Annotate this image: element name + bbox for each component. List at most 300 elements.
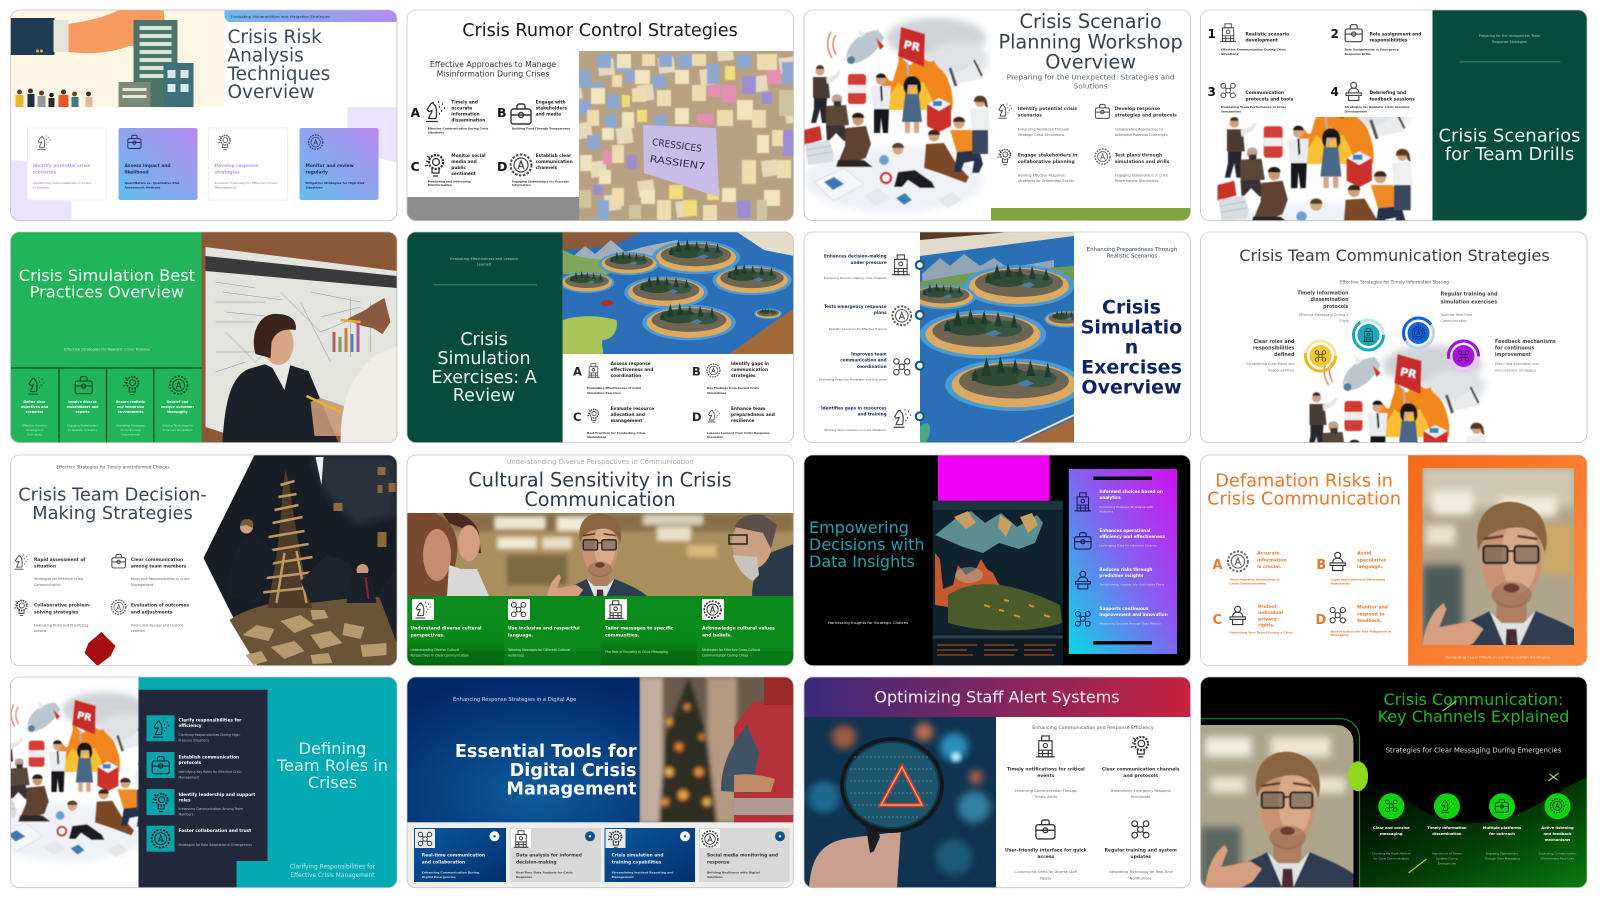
card: real-time communication: and collaboration — [422, 860, 465, 866]
item B — [497, 100, 570, 130]
title — [18, 484, 207, 524]
slide: Crisis Rumor Control Strategies — [407, 10, 812, 229]
item A: Timely and — [451, 100, 478, 106]
title: Defining — [299, 739, 366, 758]
item: team communication: communication and — [840, 358, 887, 362]
card: develop strategies: strategies — [214, 170, 240, 176]
subtitle: Effective Strategies for Timely and Informed Choices — [56, 464, 170, 470]
card: real-time communication: Enhancing Communication During — [422, 870, 479, 874]
item 1: Situations — [1221, 52, 1238, 56]
item A: A — [410, 105, 420, 120]
item: decision making: Enhances decision-making — [824, 254, 887, 258]
column: messages — [604, 599, 673, 654]
panel: blue title: Essential Tools for — [455, 742, 637, 762]
item: test: simulations and drills — [1115, 159, 1170, 165]
column: objectives: Effective Scenario — [22, 424, 47, 428]
card: simulation: Crisis simulation and — [612, 852, 664, 858]
image: island map — [562, 232, 794, 354]
panel: green title: Response Strategies — [1492, 40, 1527, 44]
panel: blue title: Enhancing Response Strategies in a Digital Age — [453, 697, 576, 703]
card: develop strategies: Management — [214, 186, 237, 190]
card: social media — [699, 828, 790, 882]
column: values: Strategies for Effective Cross-Cultural — [702, 648, 760, 652]
item C: Evaluate resource — [611, 406, 654, 412]
item: identify: Strategic Crisis Simulations — [1018, 133, 1065, 137]
column: environments: for Continuous — [121, 428, 141, 432]
item C — [573, 406, 654, 439]
card: identify scenarios: Identify potential crisis — [32, 163, 91, 169]
item: rapid assessment: Strategies for Effective Crisis — [34, 577, 83, 581]
item A: coordination — [611, 373, 641, 379]
title: n — [1125, 336, 1138, 358]
item: operational efficiency: Enhances operational — [1099, 528, 1151, 533]
item: training: Integrating Technology for Real-Time — [1109, 870, 1173, 874]
column: values: and beliefs. — [702, 632, 732, 638]
column: stakeholders: Engaging Stakeholders — [67, 424, 99, 428]
item D: Best Practices for Risk Mitigation in — [1330, 630, 1391, 634]
item 1: Effective Communication During Crisis — [1221, 48, 1286, 52]
item: gaps: and training — [858, 412, 887, 416]
title: Analysis — [228, 46, 304, 66]
item 2: Role Assignments in Emergency — [1344, 48, 1399, 52]
item 4: 4 — [1330, 85, 1339, 99]
panel: green title: Review — [453, 386, 515, 406]
item C: Monitoring and Addressing — [428, 180, 471, 184]
item: timely notifications — [1007, 736, 1085, 799]
title: Data Insights — [809, 552, 915, 571]
frame: green outline — [1200, 719, 1360, 888]
item: training: Notifications — [1130, 876, 1152, 880]
column: objectives: Development — [25, 428, 44, 432]
slide: Crisis Simulation Exercises: A Review — [407, 232, 794, 443]
item: reduces risks: Transforming Insights into Actionable Plans — [1098, 582, 1164, 586]
item: engage: Strategies for Unforeseen Events — [1018, 179, 1074, 183]
item: protocols: Management — [178, 776, 200, 780]
subtitle: Effective Strategies for Realistic Crisis Training — [64, 348, 150, 352]
item B: B — [692, 364, 701, 378]
item: collaborative: Actions — [34, 629, 47, 633]
item: clear communication: among team members — [131, 564, 187, 570]
item: collaborative: solving strategies — [34, 610, 79, 616]
item B: Engage with — [536, 100, 566, 106]
column: understand: Perspectives in Crisis Communication — [410, 654, 469, 658]
item: roles — [1246, 339, 1295, 372]
card: social media: Building Resilience with Digital — [707, 870, 760, 874]
item A: information — [1257, 558, 1287, 564]
card: assess impact: Assess impact and — [124, 163, 171, 169]
item: develop: Develop response — [1115, 106, 1160, 112]
item 3: Communication — [1246, 90, 1284, 96]
item: rapid assessment: Communication — [34, 583, 61, 587]
item: clear communication — [112, 554, 189, 587]
item D: resilience — [731, 418, 755, 424]
item: roles: responsibilities — [1253, 346, 1295, 352]
column: messages: communities. — [605, 632, 640, 638]
column: debrief: analyze outcomes — [161, 405, 194, 409]
item: test: Preparedness Discussions — [1115, 179, 1159, 183]
item C: privacy — [1258, 616, 1277, 622]
subtitle: Misinformation During Crises — [437, 70, 549, 78]
item A: Simulation Exercises — [587, 391, 621, 395]
title — [1000, 13, 1182, 69]
card: simulation: Streamlining Incident Reporting and — [612, 870, 673, 874]
title — [1378, 690, 1569, 726]
column: understand: Understand diverse cultural — [410, 626, 482, 632]
item: engage: Engage stakeholders in — [1018, 152, 1077, 158]
title — [468, 468, 732, 511]
item A: dissemination — [451, 118, 485, 124]
item: team communication: coordination — [857, 364, 887, 369]
subtitle — [290, 864, 376, 879]
item C: Misinformation — [428, 183, 452, 187]
item: interface: Customizing Alerts for Diverse Staff — [1015, 870, 1078, 874]
item B: communication — [731, 367, 768, 373]
item A: Situations — [428, 130, 444, 134]
item: collaboration — [146, 826, 252, 852]
column: multiple platforms: Engaging Stakeholders — [1486, 852, 1519, 856]
item: collaboration: Foster collaboration and trust — [178, 828, 251, 834]
item A: Understanding Defamation in — [1230, 578, 1280, 582]
card: real-time communication: Real-time communication — [422, 852, 485, 858]
item A — [410, 100, 489, 134]
icon: purple donut — [1446, 339, 1481, 373]
item: test — [1095, 149, 1170, 183]
header with title — [804, 677, 1191, 717]
item: engage: Building Effective Response — [1018, 174, 1065, 178]
item: decision making: Enhancing Decision-Making Under Pressure — [824, 276, 887, 280]
item C: rights. — [1258, 622, 1275, 628]
header with title: Optimizing Staff Alert Systems — [874, 688, 1120, 706]
item 3 — [1208, 83, 1294, 114]
item: gaps: Building Team Cohesion in Crisis Situations — [824, 428, 887, 432]
item: protocols: Identifying Key Roles for Effective Crisis — [178, 770, 242, 774]
item D: Monitor and — [1357, 604, 1388, 610]
item: collaboration: Strategies for Role Adaptation in Emergencies — [178, 843, 252, 847]
item: develop — [1095, 104, 1177, 137]
card: develop strategies: Develop response — [214, 163, 259, 169]
item: decision making: under pressure — [850, 260, 887, 265]
title: Practices Overview — [30, 282, 184, 302]
item: rapid assessment: situation — [34, 564, 56, 570]
item: timely notifications: Timely Alerts — [1033, 795, 1057, 799]
column: environments: Debriefing Strategies — [116, 424, 145, 428]
slide: Crisis Team Decision-Making Strategies — [10, 455, 398, 666]
item: channels: and protocols — [1123, 773, 1158, 779]
item B: Simulations — [707, 391, 727, 395]
item: roles: Clear roles and — [1254, 339, 1295, 345]
panel: blue title: Digital Crisis — [510, 761, 637, 781]
item: responsibilities — [146, 715, 242, 742]
item C: media and — [451, 159, 477, 165]
column: objectives: Define clear — [23, 400, 46, 404]
item: roles: Establishing Clear Roles and — [1246, 362, 1294, 366]
card: identify scenarios — [28, 128, 106, 200]
title: Crises — [308, 773, 357, 792]
subtitle: Enhancing Preparedness Through — [1087, 247, 1177, 253]
column: language: language. — [508, 632, 534, 638]
item: leadership: Identify leadership and support — [178, 792, 255, 798]
item: team communication: Improves team — [851, 352, 887, 356]
item: engage — [997, 149, 1077, 183]
slide: Crisis Communication: Key Channels Explained — [1191, 677, 1588, 900]
item: channels: Streamlining Emergency Response — [1110, 789, 1171, 793]
item C: management — [611, 418, 642, 424]
item: evaluation: Learned — [131, 629, 145, 633]
column: debrief — [161, 376, 194, 432]
column: multiple platforms: Through Clear Messaging — [1483, 856, 1520, 860]
item: timely: protocols — [1323, 304, 1349, 310]
item B — [692, 361, 769, 395]
item: develop: Anticipate Potential Challenges — [1115, 133, 1168, 137]
item: channels: Procedures — [1131, 795, 1151, 799]
item A: Accurate — [1257, 550, 1280, 556]
item A: information — [451, 112, 480, 118]
card: data analysis — [510, 828, 601, 882]
illustration: crisis scene — [1300, 345, 1486, 541]
item: roles: Responsibilities — [1268, 368, 1295, 372]
item C: allocation and — [611, 412, 645, 418]
column: stakeholders: for Realistic Scenarios — [68, 428, 98, 432]
column: multiple platforms: for outreach — [1489, 832, 1515, 836]
photo: woman at whiteboard — [202, 232, 397, 442]
slide: Crisis Simulation Exercises Overview — [804, 232, 1190, 443]
column: stakeholders — [66, 377, 99, 432]
column: timely information: Emergencies — [1438, 862, 1456, 866]
title: Crisis Rumor Control Strategies — [462, 21, 738, 41]
card: monitor: regularly — [306, 170, 328, 176]
item: feedback: for continuous — [1495, 346, 1534, 352]
item 4: Development — [1344, 110, 1368, 114]
item 2 — [1330, 25, 1421, 56]
card: identify scenarios: scenarios — [32, 170, 56, 176]
item 2: Response Drills — [1344, 52, 1371, 56]
banner: subtitle: Evaluating Vulnerabilities and Mitigation Strategies — [230, 14, 330, 19]
card: data analysis: decision-making — [516, 860, 557, 866]
icon: yellow donut — [1306, 341, 1336, 371]
item A: Crisis Communication — [1230, 582, 1266, 586]
column: environments: Improvement — [121, 432, 140, 436]
card: data analysis: Real-Time Data Analysis for Crisis — [516, 870, 573, 874]
item D: preparedness and — [731, 412, 775, 418]
item C: sentiment — [451, 171, 476, 177]
item: emergency plans — [824, 304, 911, 331]
photo: worried man — [1200, 725, 1354, 888]
slide: Optimizing Staff Alert Systems — [804, 677, 1191, 888]
item: collaborative: Collaborative problem- — [34, 602, 91, 608]
item B: B — [1316, 558, 1326, 573]
item: collaborative: Evaluating Risks and Prioritizing — [34, 624, 88, 628]
slide: Essential Tools for Digital Crisis Management — [407, 677, 794, 888]
title: Team Roles in — [276, 756, 388, 775]
subtitle: Preparing for the Unexpected: Strategies and — [1007, 72, 1175, 82]
slide: Empowering Decisions with Data Insights — [804, 455, 1190, 666]
item C: Monitor social — [451, 153, 486, 159]
item 4: feedback sessions — [1370, 96, 1415, 102]
photo: worried man — [1422, 468, 1574, 645]
item: protocols: protocols — [178, 760, 202, 766]
item C: public — [451, 165, 466, 171]
item: feedback: Feedback mechanisms — [1495, 339, 1556, 345]
column: objectives: objectives and — [21, 405, 49, 409]
title: Decisions with — [809, 535, 924, 554]
column: messages: Tailor messages to specific — [605, 626, 673, 632]
item C: Protect — [1258, 604, 1278, 610]
item: training — [1105, 821, 1177, 880]
item 4: Strategies for Realistic Crisis Scenario — [1344, 105, 1410, 109]
card: monitor: Monitor and review — [306, 163, 354, 169]
item 4 — [1330, 82, 1415, 114]
item: collaborative — [14, 600, 91, 633]
marker: lime blob — [1348, 761, 1368, 791]
photo: responder and tree — [640, 677, 794, 822]
item D: channels — [536, 165, 558, 171]
panel: gradient list — [1069, 469, 1177, 654]
decoration: red polygon — [84, 632, 116, 666]
item: rapid assessment: Rapid assessment of — [34, 557, 85, 563]
item: feedback: improvement — [1495, 352, 1532, 358]
panel: green title: Crisis — [460, 330, 508, 350]
item B: stakeholders — [536, 106, 567, 112]
subtitle: Clarifying Responsibilities for — [290, 864, 376, 870]
column: understand: perspectives. — [410, 632, 445, 638]
column: clear messaging: messaging — [1380, 832, 1403, 836]
card: assess impact: likelihood — [124, 170, 149, 176]
card: social media: Solutions — [707, 875, 723, 879]
item: leadership: Enhancing Communication Among Team — [178, 807, 243, 811]
item B: language. — [1357, 564, 1383, 570]
item: clear communication: Management — [131, 583, 154, 587]
title: Simulatio — [1081, 316, 1182, 338]
item: rapid assessment — [15, 555, 85, 587]
item: informed choices: analytics — [1099, 495, 1121, 500]
column: active listening — [1539, 793, 1577, 860]
title: Techniques — [226, 64, 330, 85]
card: simulation: Management — [612, 875, 634, 879]
item: operational efficiency: efficiency and effectiveness — [1099, 534, 1165, 539]
illustration: crisis scene — [10, 677, 138, 888]
column: language: Audiences — [508, 654, 524, 658]
item: emergency plans: plans — [874, 310, 887, 315]
column: environments: and immersive — [117, 405, 145, 409]
slide: Crisis Risk Analysis Techniques Overview — [10, 10, 398, 221]
title — [276, 739, 388, 792]
title — [1207, 470, 1401, 510]
column: debrief: Debrief and — [167, 400, 189, 404]
item 1 — [1208, 24, 1289, 56]
item: leadership: roles — [178, 798, 191, 804]
title: Crisis Team Decision- — [18, 484, 207, 506]
photo: sticky note wall: CRESSICES — [651, 137, 702, 155]
item A: Evaluating Effectiveness of Crisis — [587, 386, 641, 390]
item: continuous improvement: Measuring Success through Data Metrics — [1099, 622, 1161, 626]
title: Key Channels Explained — [1378, 707, 1569, 726]
title: Planning Workshop — [998, 30, 1183, 54]
item: interface: access — [1037, 855, 1055, 860]
item: responsibilities: efficiency — [178, 723, 202, 729]
title: Crisis Team Communication Strategies — [1239, 246, 1550, 265]
icon: teal donut — [1354, 320, 1384, 350]
item: training: simulation exercises — [1440, 300, 1497, 306]
card: monitor — [300, 128, 378, 200]
item D: D — [692, 410, 702, 424]
card: data analysis: Data analysis for informed — [516, 852, 582, 858]
illustration: crisis scene — [1216, 117, 1412, 220]
item: reduces risks: Reduces risks through — [1099, 567, 1152, 572]
column: timely information: Timely information — [1427, 826, 1467, 830]
subtitle — [1007, 74, 1174, 88]
item: clear communication: Clear communication — [131, 557, 183, 563]
column: clear messaging: Choosing the Right Medium — [1372, 852, 1411, 856]
column: understand: Understanding Diverse Cultural — [410, 648, 459, 652]
card: social media: response — [707, 860, 730, 866]
item: operational efficiency — [1075, 528, 1165, 549]
item A: Effective Communication During Crisis — [428, 126, 489, 130]
item D: communication — [536, 159, 573, 165]
card: assess impact: Quantitative vs. Qualitative Risk — [124, 181, 181, 185]
item: timely notifications: Enhancing Communication Through — [1014, 789, 1077, 793]
card: social media: Social media monitoring and — [707, 852, 778, 858]
item: evaluation: Evaluation of outcomes — [131, 602, 189, 608]
title: Crisis Communication: — [1384, 690, 1563, 709]
item D: Lessons Learned from Crisis Response — [707, 431, 770, 435]
image: island map — [920, 232, 1074, 442]
item: interface: User-friendly interface for quick — [1005, 848, 1088, 854]
item: protocols: Establish communication — [178, 754, 239, 760]
item B: Key Findings from Recent Crisis — [707, 386, 759, 390]
item: identify — [998, 104, 1077, 137]
title: Crisis Communication — [1207, 488, 1401, 510]
item: emergency plans: Tests emergency response — [824, 304, 887, 309]
sparkles — [1408, 701, 1558, 873]
item: timely notifications: Timely notifications for critical — [1007, 766, 1085, 772]
item: test: Engaging Stakeholders in Crisis — [1115, 174, 1168, 178]
column: environments: environments — [118, 410, 143, 414]
item: interface: Needs — [1040, 876, 1051, 880]
item: gaps: Identifies gaps in resources — [821, 406, 887, 410]
column: timely information: Importance of Timely — [1432, 852, 1462, 856]
item D: Establish clear — [536, 153, 572, 159]
title: Empowering — [809, 518, 909, 537]
column: active listening: and feedback — [1543, 832, 1572, 836]
item: informed choices: Enhancing Business Strategies with — [1099, 505, 1153, 509]
item D: D — [497, 159, 507, 174]
card: real-time communication — [414, 828, 506, 882]
title: Crisis Simulation Best — [19, 266, 195, 285]
item: responsibilities: Pressure Situations — [178, 738, 209, 742]
item B: Statements — [1330, 582, 1350, 586]
slide: Defining Team Roles in Crises — [0, 677, 397, 888]
title — [20, 269, 195, 298]
column: debrief: thoroughly — [167, 410, 189, 414]
item: responsibilities: Clarify responsibilities for — [178, 718, 242, 724]
item C: Protecting Your Brand During a Crisis — [1230, 630, 1293, 634]
item 3: Evaluating Team Performance in Crisis — [1221, 105, 1286, 109]
item: team communication — [819, 352, 910, 382]
column: environments — [116, 377, 145, 436]
slide: Crisis Simulation Best Practices Overview — [10, 232, 398, 443]
column: values: Acknowledge cultural values — [702, 626, 775, 632]
column: timely information — [1427, 793, 1467, 866]
item: training — [1440, 292, 1498, 323]
item C — [1212, 604, 1293, 634]
item B: Building Trust Through Transparency — [512, 126, 570, 130]
item C: Simulations — [587, 435, 607, 439]
item: channels: Clear communication channels — [1102, 766, 1180, 772]
banner: subtitle — [224, 10, 398, 22]
subtitle: Effective Crisis Management — [290, 873, 375, 879]
item C: Best Practices for Conducting Crisis — [587, 431, 646, 435]
panel: green title: Evaluating Effectiveness and Lessons — [450, 257, 518, 261]
